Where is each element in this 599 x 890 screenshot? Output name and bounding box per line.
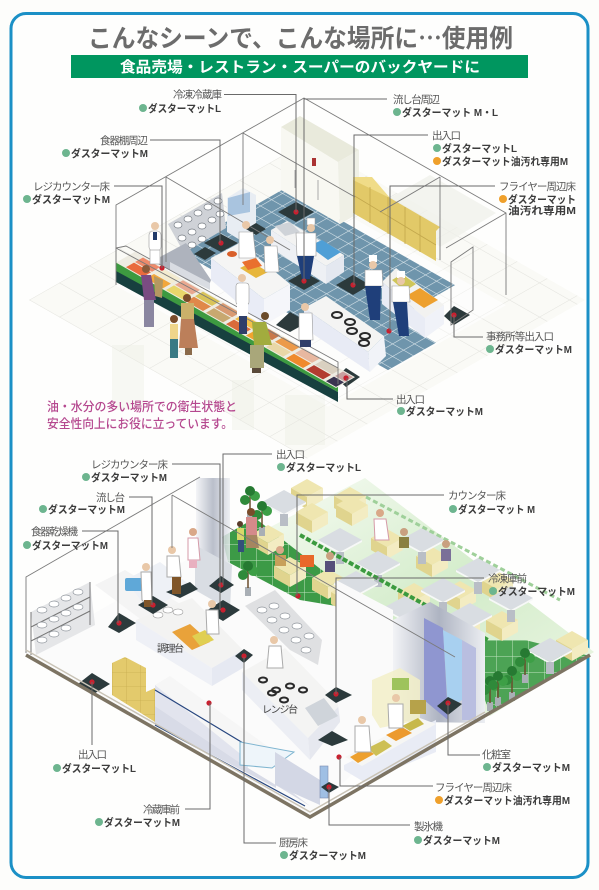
label: 事務所等出入口 — [454, 315, 572, 356]
label: 出入口 (lower top): ダスターマットL — [286, 461, 362, 474]
floor mats, lower — [78, 576, 462, 793]
preparation island — [211, 243, 290, 325]
potted plants — [238, 486, 535, 711]
sink and counters back wall — [95, 545, 232, 630]
label: 流し台周辺: 流し台周辺 — [393, 93, 440, 106]
area label: 調理台: 調理台 — [157, 642, 184, 655]
callout: 油・水分 message — [47, 399, 237, 431]
label: レジカウンター床 (lower): レジカウンター床 — [91, 459, 168, 471]
waitress A — [236, 274, 249, 334]
label: 冷蔵庫前: 冷蔵庫前 — [143, 803, 180, 816]
label: 出入口 (lower top) — [223, 449, 362, 585]
label: 食器乾燥機: 食器乾燥機 — [31, 525, 78, 538]
subtitle banner — [71, 55, 528, 78]
plant divider rows — [300, 535, 488, 640]
label: カウンター床: カウンター床 — [448, 490, 506, 502]
cook at dishwasher — [167, 546, 181, 594]
label: 出入口 (upper right): ダスターマット油汚れ専用M — [442, 155, 568, 168]
range counter with burners — [304, 296, 386, 372]
dining floor — [222, 478, 594, 716]
illustration: restaurant kitchen — [26, 477, 594, 817]
red position dots — [159, 209, 457, 381]
white wall block — [336, 580, 393, 720]
label: 化粧室: 化粧室 — [482, 748, 511, 761]
label: 冷凍庫前: ダスターマットM — [498, 585, 575, 598]
yellow boxes lower — [112, 657, 155, 722]
refrigerator counter — [155, 676, 328, 806]
label: 化粧室: ダスターマットM — [492, 761, 570, 774]
shelf with boxes — [372, 668, 426, 728]
fryer counter with trays — [382, 268, 444, 338]
range counter レンジ台 — [242, 648, 340, 760]
staff figures — [149, 218, 410, 347]
label: 出入口 (lower left) — [53, 682, 137, 775]
blue tile floor — [177, 188, 496, 370]
tall steel refrigerators — [393, 602, 485, 723]
label: 流し台 — [39, 491, 152, 605]
label: 冷蔵庫前 — [95, 703, 210, 829]
label: カウンター床: ダスターマット M — [458, 503, 535, 516]
label: フライヤー周辺床: 油汚れ専用M — [508, 204, 576, 217]
green tile floor right — [485, 640, 590, 714]
fryer cooks — [355, 694, 403, 752]
dish rack — [168, 193, 226, 253]
yellow cardboard boxes — [353, 175, 496, 261]
label: 流し台: ダスターマットM — [48, 503, 125, 516]
label: 出入口 (front): ダスターマットM — [406, 405, 483, 418]
kitchen staff and diners — [141, 508, 451, 752]
cooking island 調理台 — [136, 598, 243, 686]
label: 流し台周辺: ダスターマット M・L — [402, 106, 499, 119]
label: 食器乾燥機 — [23, 525, 118, 623]
sink counter with water — [271, 221, 344, 284]
cook at sink — [141, 563, 152, 607]
cook E — [392, 271, 410, 336]
wall wireframe lines — [116, 98, 506, 325]
label: レジカウンター床: ダスターマットM — [32, 193, 110, 206]
cook at island — [206, 600, 219, 634]
dishwasher unit — [227, 188, 256, 240]
cook C — [296, 218, 316, 279]
customer family — [237, 508, 259, 552]
fryer counter lower — [344, 718, 436, 782]
label: 事務所等出入口: 事務所等出入口 — [486, 330, 554, 343]
woman in olive top — [250, 312, 272, 373]
label: フライヤー周辺床 (lower): フライヤー周辺床 — [435, 782, 512, 794]
label: 厨房床: ダスターマットM — [289, 849, 366, 862]
label: レジカウンター床 (lower) — [82, 459, 220, 610]
label: レジカウンター床 — [23, 181, 162, 268]
label: 出入口 (lower top): 出入口 — [276, 449, 305, 461]
area label: レンジ台: レンジ台 — [262, 703, 298, 716]
label: 製氷機: ダスターマットM — [423, 834, 500, 847]
label: フライヤー周辺床 (lower) — [340, 757, 570, 807]
shopper figures — [141, 265, 272, 373]
label: 出入口 (front): 出入口 — [396, 394, 425, 406]
cook D — [365, 255, 383, 320]
right dish rack — [245, 590, 322, 665]
callout: 油・水分 message: 安全性向上にお役に立っています。 — [47, 416, 233, 431]
waitress B — [299, 303, 313, 347]
label: 食器乾燥機: ダスターマットM — [32, 539, 108, 552]
deli display counter — [116, 246, 355, 402]
label: 冷蔵庫前: ダスターマットM — [104, 816, 180, 829]
food trays — [116, 252, 355, 388]
label: 食器棚周辺 — [62, 134, 220, 243]
label: 厨房床: 厨房床 — [279, 837, 308, 849]
red position dots — [89, 582, 451, 790]
label: 製氷機 — [329, 787, 500, 847]
callout: 油・水分 message: 油・水分の多い場所での衛生状態と — [47, 399, 237, 414]
label: フライヤー周辺床: フライヤー周辺床 — [499, 181, 576, 193]
label: 厨房床 — [244, 657, 366, 862]
label: 出入口 (lower left): 出入口 — [78, 749, 107, 761]
cashier — [149, 222, 161, 264]
floor mats, upper — [194, 202, 470, 387]
wall wireframe and base edge — [26, 477, 590, 817]
cook A — [239, 221, 256, 258]
label: 流し台周辺 — [304, 93, 499, 281]
cook B — [264, 236, 279, 272]
walk-in refrigerator wall — [281, 116, 359, 224]
label: レジカウンター床 (lower): ダスターマットM — [91, 471, 167, 484]
label: 出入口 (upper right) — [354, 130, 568, 285]
child — [170, 315, 178, 358]
green tile floor — [222, 518, 350, 606]
label: 出入口 (upper right): ダスターマットL — [442, 142, 518, 155]
woman in brown skirt — [179, 294, 198, 355]
cash counter unit — [160, 243, 211, 290]
shopper with bag — [141, 265, 163, 327]
subtitle banner: 食品売場・レストラン・スーパーのバックヤードに — [120, 56, 480, 77]
label: 化粧室 — [448, 703, 570, 774]
waitress at register — [188, 528, 200, 568]
seated customers — [275, 528, 451, 572]
label: 冷凍冷蔵庫 — [139, 88, 296, 212]
label: カウンター床 — [297, 490, 535, 596]
label: 冷凍冷蔵庫: ダスターマットL — [148, 102, 222, 115]
label: フライヤー周辺床 — [390, 181, 576, 331]
label: 流し台: 流し台 — [96, 491, 125, 504]
label: レジカウンター床: レジカウンター床 — [33, 181, 110, 193]
title: こんなシーンで、こんな場所に…使用例 — [88, 19, 513, 55]
label: 冷凍庫前: 冷凍庫前 — [488, 572, 527, 585]
label: フライヤー周辺床 (lower): ダスターマット油汚れ専用M — [444, 794, 570, 807]
label: 事務所等出入口: ダスターマットM — [495, 343, 572, 356]
label: 食器棚周辺: 食器棚周辺 — [100, 134, 148, 147]
illustration: supermarket back yard — [29, 98, 585, 458]
tall steel cabinet — [196, 478, 230, 568]
label: 出入口 (upper right): 出入口 — [432, 130, 461, 142]
label: 出入口 (lower left): ダスターマットL — [62, 762, 137, 775]
store floor — [29, 142, 585, 458]
label: 出入口 (front) — [347, 378, 483, 418]
label: 製氷機: 製氷機 — [414, 820, 444, 833]
cook at range — [267, 636, 283, 668]
label: フライヤー周辺床: ダスターマット — [508, 193, 576, 206]
label: 冷凍庫前 — [336, 572, 575, 694]
dining waitress — [374, 509, 389, 540]
label: 冷凍冷蔵庫: 冷凍冷蔵庫 — [173, 88, 222, 101]
dining tables and seats — [252, 479, 588, 674]
kitchen base floor — [26, 552, 470, 815]
left dish rack — [31, 582, 95, 655]
label: 食器棚周辺: ダスターマットM — [71, 147, 148, 160]
soft floor reflections — [112, 345, 325, 445]
